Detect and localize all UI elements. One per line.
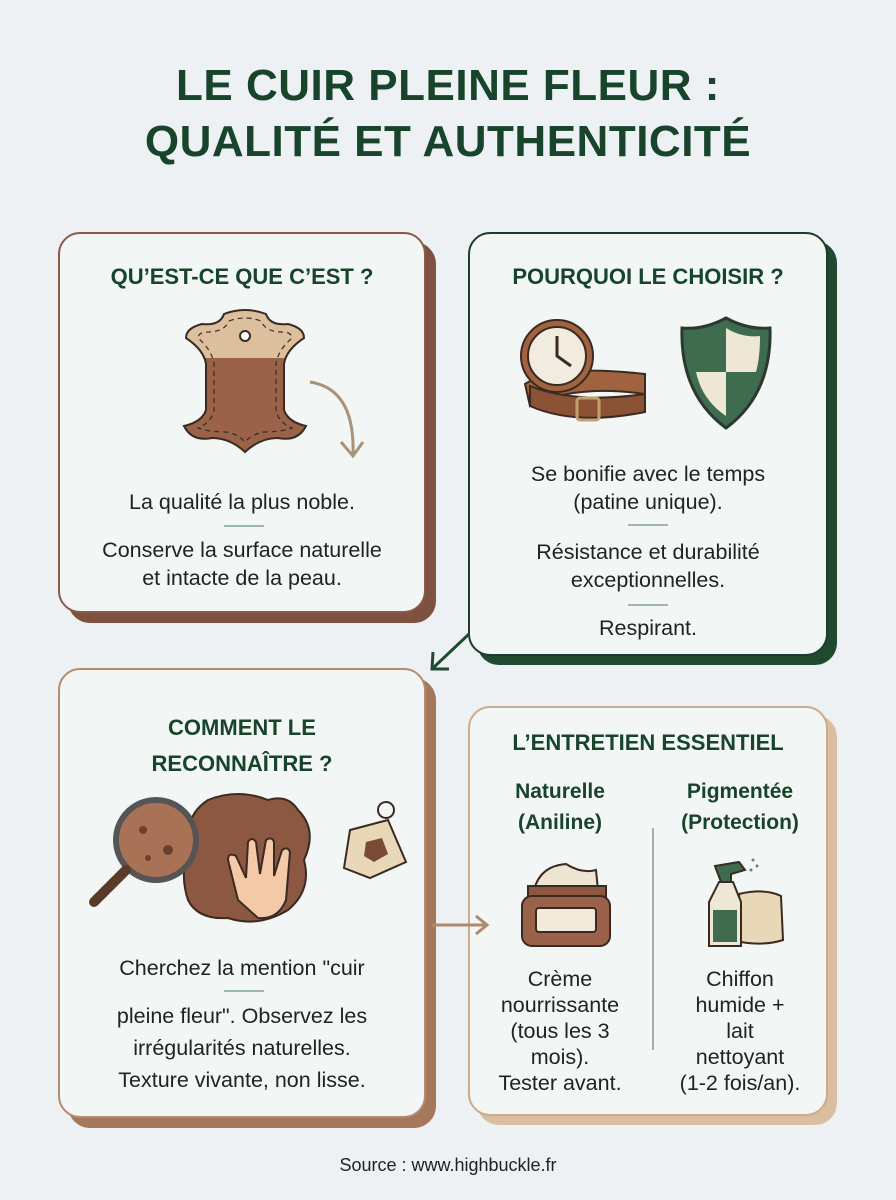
title: LE CUIR PLEINE FLEUR : xyxy=(176,61,720,110)
column: pigmentée: (1-2 fois/an). xyxy=(680,1071,800,1095)
heading: L’ENTRETIEN ESSENTIEL xyxy=(512,730,784,755)
heading: POURQUOI LE CHOISIR ? xyxy=(512,264,784,289)
column: pigmentée: (Protection) xyxy=(681,811,799,834)
text: La qualité la plus noble. xyxy=(129,490,355,514)
source: Source : www.highbuckle.fr xyxy=(339,1155,557,1175)
column: pigmentée: Chiffon xyxy=(706,967,774,991)
column: naturelle: Naturelle xyxy=(515,780,605,803)
heading: COMMENT LE xyxy=(168,715,316,740)
heading: QU’EST-CE QUE C’EST ? xyxy=(111,264,373,289)
column: naturelle: Crème xyxy=(528,967,592,991)
panel: comment le reconnaître: irrégularités naturelles. xyxy=(133,1036,351,1060)
column: naturelle: (Aniline) xyxy=(518,811,602,834)
text: Cherchez la mention "cuir xyxy=(119,956,365,980)
panel: qu'est-ce que c'est: et intacte de la peau. xyxy=(142,566,342,590)
column: pigmentée: Pigmentée xyxy=(687,780,793,803)
column: pigmentée: nettoyant xyxy=(696,1045,784,1069)
heading xyxy=(152,715,332,776)
column: naturelle: Tester avant. xyxy=(498,1071,622,1095)
column: naturelle: (tous les 3 xyxy=(510,1019,610,1043)
arrow: curved down xyxy=(310,380,364,458)
column: pigmentée xyxy=(680,780,800,1095)
title: QUALITÉ ET AUTHENTICITÉ xyxy=(145,117,751,166)
divider line xyxy=(652,828,654,1050)
column: naturelle xyxy=(498,780,622,1095)
arrow: tan right xyxy=(432,915,490,935)
panel: l'entretien essentiel xyxy=(468,706,828,1116)
icon: cream jar xyxy=(521,863,611,947)
icon: magnifier, hide, hand, tag xyxy=(89,793,408,923)
column: naturelle: mois). xyxy=(531,1045,589,1069)
panel: pourquoi le choisir xyxy=(468,232,828,656)
title xyxy=(145,61,751,166)
panel: pourquoi le choisir: Respirant. xyxy=(599,616,697,640)
text xyxy=(531,462,765,514)
icon: watch and belt xyxy=(520,319,646,422)
column: pigmentée: lait xyxy=(726,1019,754,1043)
text: (patine unique). xyxy=(573,490,723,514)
panel: qu'est-ce que c'est: Conserve la surface naturelle xyxy=(102,538,382,562)
panel: pourquoi le choisir: exceptionnelles. xyxy=(571,568,725,592)
arrow: green diagonal xyxy=(430,632,470,670)
heading: RECONNAÎTRE ? xyxy=(152,751,332,776)
icon: spray and cloth xyxy=(708,858,784,947)
panel: comment le reconnaître: Texture vivante, non lisse. xyxy=(118,1068,366,1092)
panel: pourquoi le choisir: Résistance et durabilité xyxy=(536,540,760,564)
panel: qu'est-ce que c'est xyxy=(58,232,426,613)
text: Se bonifie avec le temps xyxy=(531,462,765,486)
panel: comment le reconnaître xyxy=(58,668,426,1118)
column: naturelle: nourrissante xyxy=(501,993,619,1017)
panel: comment le reconnaître: pleine fleur". Observez les xyxy=(117,1004,367,1028)
column: pigmentée: humide + xyxy=(695,993,785,1017)
icon: shield xyxy=(680,316,772,430)
icon: leather hide xyxy=(182,309,308,454)
